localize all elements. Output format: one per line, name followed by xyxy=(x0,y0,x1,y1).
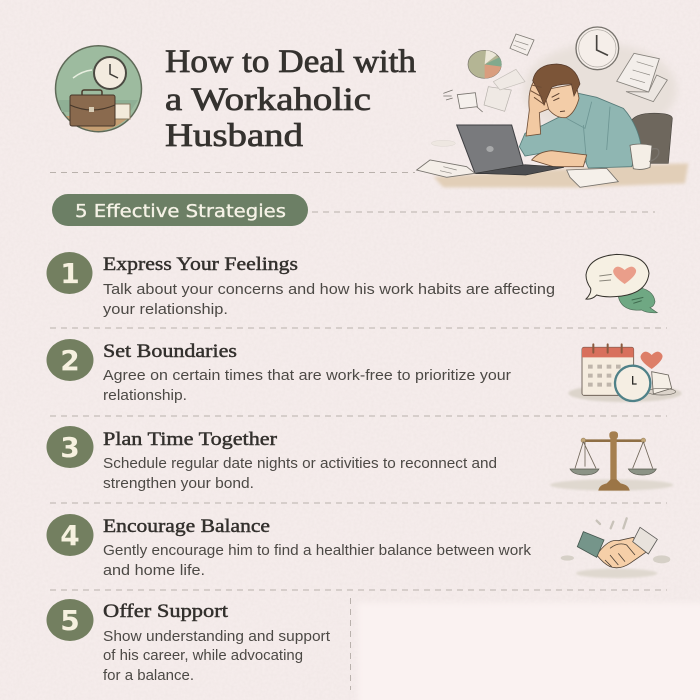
strategy 1: 1 xyxy=(60,257,80,290)
laptop xyxy=(457,125,564,175)
strategy 4: Gently encourage him to find a healthier balance between work xyxy=(103,542,532,559)
strategy 3: strengthen your bond. xyxy=(103,475,254,492)
strategy 1: Express Your Feelings xyxy=(103,254,298,275)
title: a Workaholic xyxy=(165,82,371,118)
face details xyxy=(552,93,565,112)
strategy 4: and home life. xyxy=(103,562,205,579)
strategy 5: 5 xyxy=(60,604,80,637)
wall clock xyxy=(576,27,619,70)
title: How to Deal with xyxy=(165,44,417,80)
shirt and body xyxy=(519,93,641,168)
header divider xyxy=(50,172,415,174)
section heading pill xyxy=(52,194,308,226)
strategy 3: Plan Time Together xyxy=(103,429,278,450)
strategy 2 xyxy=(46,339,511,404)
hair xyxy=(533,64,580,105)
strategy 1: your relationship. xyxy=(103,301,228,318)
icon: handshake xyxy=(561,518,670,578)
illustration: stressed man at desk xyxy=(417,27,688,187)
floating papers xyxy=(443,34,667,112)
strategy 4: Encourage Balance xyxy=(103,516,270,537)
title: Husband xyxy=(165,118,304,154)
strategy 4 xyxy=(46,514,532,579)
head xyxy=(543,84,579,118)
strategy 1 xyxy=(46,252,555,318)
blank patch bottom right xyxy=(358,603,700,700)
icon: speech bubbles with heart xyxy=(586,254,657,313)
strategy 3: 3 xyxy=(60,431,80,464)
strategy 3 xyxy=(46,426,497,492)
strategy 5 xyxy=(46,599,331,684)
strategy 5: of his career, while advocating xyxy=(103,647,303,664)
title xyxy=(165,44,417,154)
mug xyxy=(630,144,659,169)
pie chart xyxy=(468,50,502,78)
icon: balance scale xyxy=(550,431,673,491)
strategy 2: Set Boundaries xyxy=(103,341,237,362)
desk papers xyxy=(417,140,618,187)
table xyxy=(433,163,688,187)
section heading pill: 5 Effective Strategies xyxy=(75,201,286,222)
strategy 5: for a balance. xyxy=(103,667,194,684)
strategy 4: 4 xyxy=(60,519,80,552)
lower hand xyxy=(532,151,587,167)
strategy 2: relationship. xyxy=(103,387,187,404)
strategy 5: Show understanding and support xyxy=(103,628,331,645)
fingers on hair xyxy=(531,85,545,105)
raised arm and hand xyxy=(526,81,550,136)
strategy 3: Schedule regular date nights or activities to reconnect and xyxy=(103,455,497,472)
icon: calendar, clock and heart xyxy=(568,344,682,402)
strategy 1: Talk about your concerns and how his work habits are affecting xyxy=(103,281,555,298)
strategy 5: Offer Support xyxy=(103,601,229,622)
icon: clock and briefcase badge xyxy=(56,46,142,132)
strategy 2: 2 xyxy=(60,344,80,377)
strategy 2: Agree on certain times that are work-free to prioritize your xyxy=(103,367,511,384)
chair xyxy=(631,113,672,163)
